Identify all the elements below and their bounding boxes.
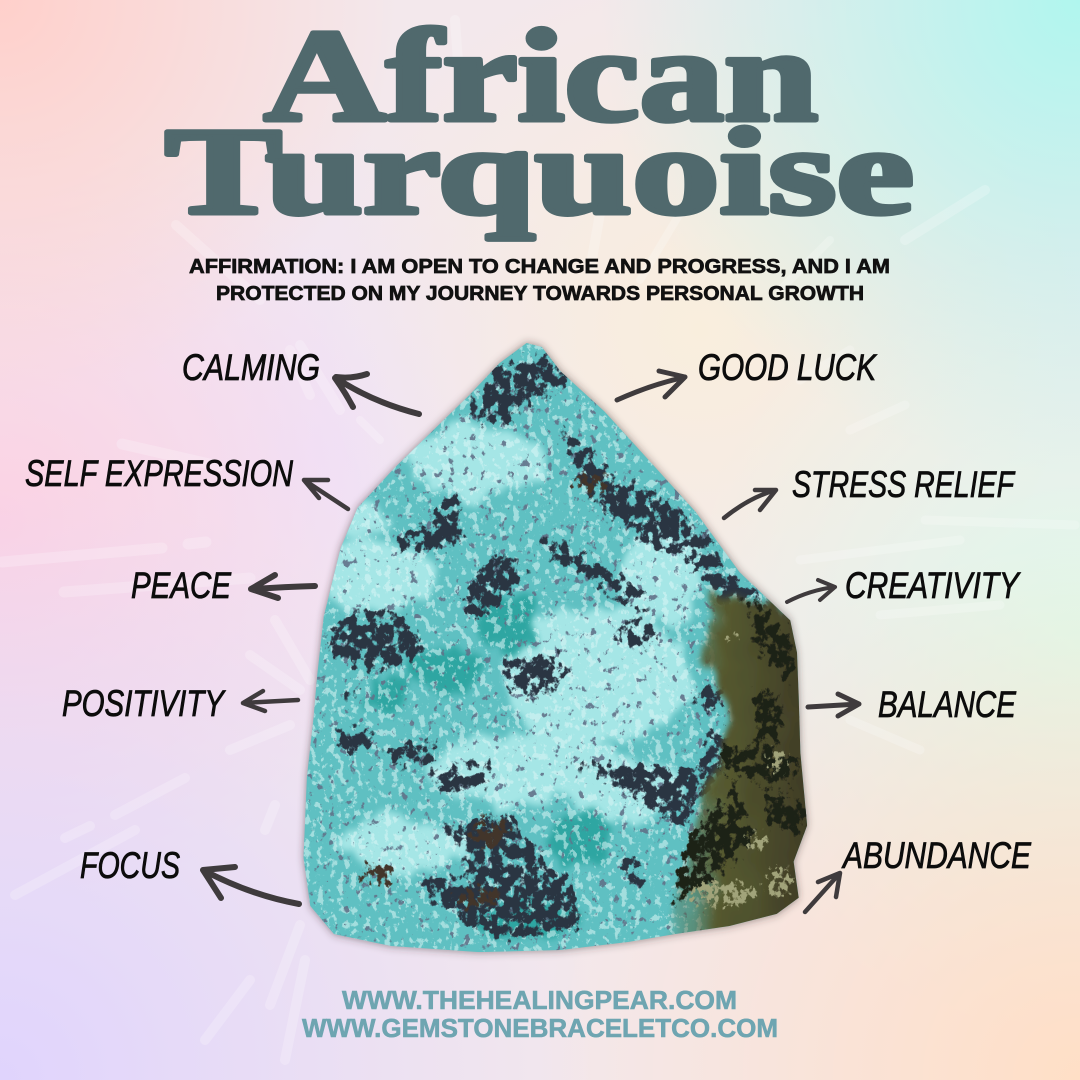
affirmation text: PROTECTED ON MY JOURNEY TOWARDS PERSONAL GROWTH <box>216 283 864 305</box>
arrow: Stress Relief <box>724 490 776 518</box>
affirmation text: AFFIRMATION: I AM OPEN TO CHANGE AND PROGRESS, AND I AM <box>189 256 890 278</box>
brown mineral streaks <box>354 472 618 912</box>
light patches <box>320 427 706 874</box>
label: Focus: FOCUS <box>80 845 180 886</box>
title <box>165 2 914 240</box>
dark veins <box>324 347 794 942</box>
arrow: Positivity <box>243 691 298 711</box>
arrow: Good Luck <box>617 371 685 400</box>
label: Positivity: POSITIVITY <box>62 683 226 724</box>
website footer <box>302 985 778 1043</box>
label: Self Expression: SELF EXPRESSION <box>25 453 293 494</box>
label: Good Luck: GOOD LUCK <box>698 347 878 388</box>
label: Stress Relief: STRESS RELIEF <box>792 464 1016 505</box>
arrow: Focus <box>203 867 299 904</box>
label: Balance: BALANCE <box>878 684 1017 725</box>
arrow: Peace <box>251 575 315 598</box>
label: Abundance: ABUNDANCE <box>841 835 1032 876</box>
arrow: Calming <box>335 374 419 414</box>
gemstone: African turquoise <box>290 335 831 978</box>
arrow: Abundance <box>805 873 840 912</box>
label: Creativity: CREATIVITY <box>845 565 1021 606</box>
shaded olive right flank <box>668 586 808 935</box>
title: Turquoise <box>165 103 914 240</box>
arrow: Creativity <box>787 580 835 602</box>
arrow: Balance <box>808 694 859 716</box>
fine marbled texture <box>304 344 806 952</box>
arrow: Self Expression <box>304 480 348 509</box>
website footer: WWW.THEHEALINGPEAR.COM <box>342 985 737 1015</box>
label: Calming: CALMING <box>182 347 320 388</box>
saturated teal patches <box>364 592 614 938</box>
title: African <box>264 2 818 149</box>
affirmation text <box>189 256 890 305</box>
website footer: WWW.GEMSTONEBRACELETCO.COM <box>302 1013 778 1043</box>
label: Peace: PEACE <box>131 565 232 606</box>
